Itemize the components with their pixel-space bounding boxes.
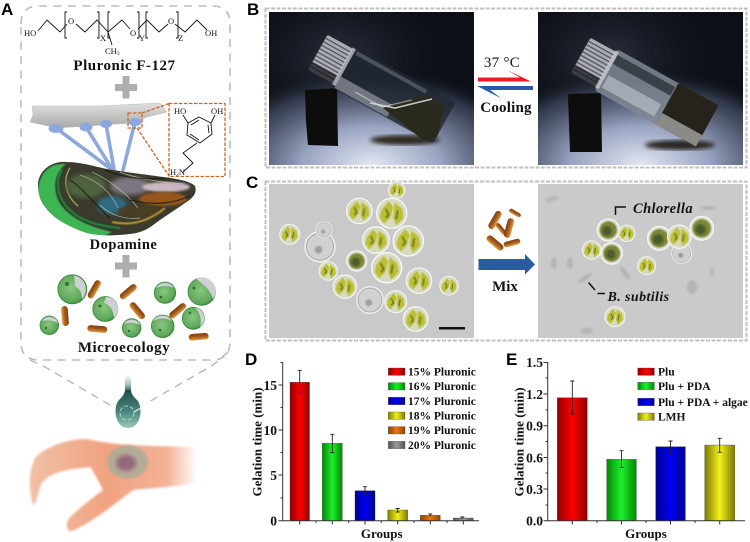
dashed frame C — [266, 182, 746, 340]
label: B. subtilis — [588, 282, 670, 305]
dopamine molecule: 2 — [176, 172, 179, 178]
label: 37 °C: 37 °C — [484, 55, 520, 71]
microecology: algae and bacteria — [40, 275, 216, 341]
legend D — [388, 366, 476, 452]
arrow: cooling, blue — [477, 86, 533, 98]
label: Cooling: Cooling — [480, 100, 532, 116]
Pluronic chemical structure: 3 — [117, 51, 120, 57]
Pluronic chemical structure: OH — [205, 28, 217, 38]
tick labels D: 0 — [270, 514, 277, 528]
legend E: Plu + PDA + algae — [658, 397, 748, 409]
Pluronic chemical structure: Z — [178, 33, 183, 43]
panel letter C: C — [246, 173, 258, 192]
legend E: Plu — [658, 366, 675, 378]
tick labels E: 0.9 — [526, 419, 543, 434]
legend D: 19% Pluronic — [408, 425, 476, 437]
Pluronic chemical structure — [24, 12, 217, 57]
error bars E — [570, 381, 722, 467]
heading: Dopamine: Dopamine — [90, 237, 157, 253]
adhesive plaques — [48, 118, 142, 133]
gray shell surface — [30, 103, 167, 128]
funnel lines to droplet — [30, 352, 228, 405]
dopamine molecule: H — [170, 167, 176, 177]
tick labels E — [526, 355, 543, 528]
label: Chlorella: Chlorella — [633, 201, 693, 217]
green algae spheres — [40, 275, 215, 338]
bars D — [290, 382, 473, 521]
legend E: Plu + PDA — [658, 381, 711, 393]
arrow: mix — [478, 254, 535, 274]
rod bacteria — [61, 279, 209, 341]
chart D: gelation time by Pluronic concentration — [250, 362, 479, 541]
bars E — [557, 398, 735, 521]
mussel illustration — [38, 162, 196, 236]
micrograph: algae with bacteria — [538, 184, 743, 338]
label: B. subtilis: B. subtilis — [606, 290, 670, 305]
dashed composition frame — [21, 6, 230, 360]
panel letter A: A — [1, 0, 13, 19]
tick labels D — [264, 378, 277, 528]
heading: Pluronic F-127: Pluronic F-127 — [73, 58, 176, 74]
Pluronic chemical structure: O — [168, 16, 174, 26]
label: Mix: Mix — [492, 279, 518, 295]
chloroplast dots — [45, 282, 195, 332]
legend E: LMH — [658, 412, 686, 424]
error bars D — [298, 370, 464, 519]
tick labels E: 0.0 — [526, 514, 543, 528]
tick labels D: 10 — [264, 423, 277, 438]
photo: sol state vial — [269, 12, 474, 165]
y axis title D: Gelation time (min) — [250, 387, 264, 497]
Pluronic chemical structure: CH — [105, 46, 117, 56]
legend D: 15% Pluronic — [408, 366, 476, 378]
Pluronic chemical structure: O — [130, 28, 136, 38]
wound under gel — [107, 446, 148, 478]
dopamine molecule — [170, 106, 223, 178]
axes E — [544, 362, 745, 524]
plus sign — [115, 76, 137, 98]
legend D: 17% Pluronic — [408, 396, 476, 408]
legend D: 18% Pluronic — [408, 410, 476, 422]
legend D: 20% Pluronic — [408, 440, 476, 452]
Pluronic chemical structure: O — [68, 16, 74, 26]
tick labels E: 1.5 — [526, 355, 543, 370]
panel letter E: E — [506, 350, 517, 369]
legend E — [638, 366, 748, 424]
hand with applied hydrogel — [30, 439, 197, 531]
bacteria cluster — [485, 208, 522, 252]
tick labels E: 0.3 — [526, 482, 543, 497]
adhesive threads — [56, 122, 135, 170]
y axis title E: Gelation time (min) — [512, 387, 526, 497]
tick labels E: 0.6 — [526, 450, 543, 466]
tick labels E: 1.2 — [526, 387, 543, 402]
dopamine molecule: OH — [211, 106, 223, 116]
legend D: 16% Pluronic — [408, 381, 476, 393]
panel B: sol-gel vial photos — [266, 8, 746, 168]
dopamine molecule: HO — [174, 106, 186, 116]
dashed frame B — [266, 8, 746, 168]
x axis title E: Groups — [625, 526, 667, 541]
tick labels D: 15 — [264, 378, 277, 393]
chart E: gelation time by formulation — [512, 355, 748, 541]
heading: Microecology: Microecology — [78, 340, 170, 356]
Pluronic chemical structure: X — [100, 33, 106, 43]
plus sign — [115, 255, 137, 278]
hydrogel droplet — [116, 375, 141, 428]
photo: gel state vial — [538, 12, 743, 165]
dopamine zoom callout — [128, 104, 225, 176]
arrow: heating, red — [478, 70, 531, 82]
Pluronic chemical structure: Y — [139, 33, 145, 43]
x axis title D: Groups — [361, 526, 403, 541]
panel letter B: B — [247, 0, 259, 19]
gray vacuoles — [42, 276, 216, 327]
panel C: micrographs — [266, 182, 746, 340]
panel letter D: D — [245, 350, 257, 369]
Pluronic chemical structure: HO — [24, 28, 36, 38]
tick labels D: 5 — [270, 468, 277, 483]
scale bar — [439, 327, 465, 330]
micrograph: algae only — [269, 182, 474, 338]
dopamine molecule: N — [179, 167, 185, 177]
axes D — [278, 362, 479, 524]
panel A: hydrogel composition — [21, 6, 230, 360]
